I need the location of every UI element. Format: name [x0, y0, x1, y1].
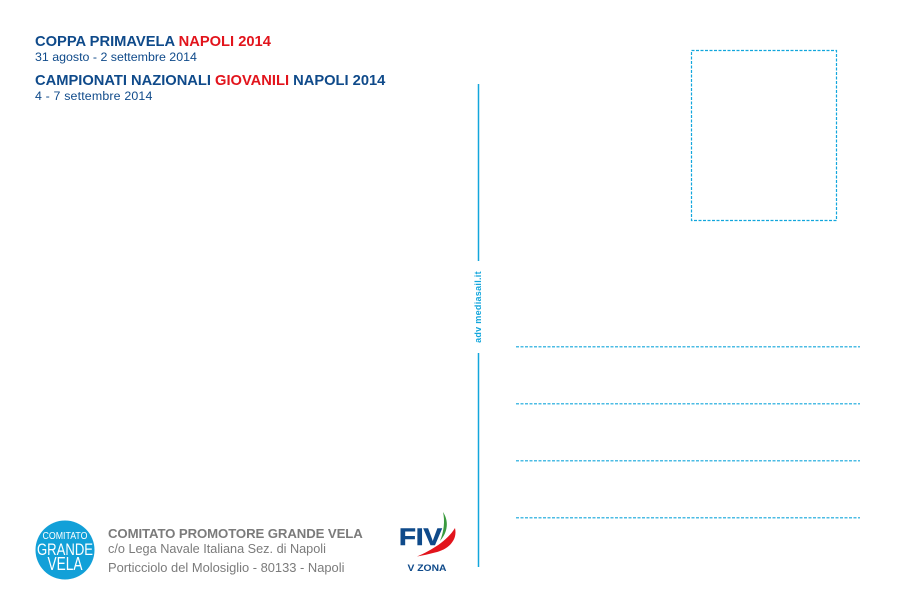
logo: FIV V Zona [399, 512, 456, 574]
address lines [516, 346, 860, 518]
logo: Comitato Grande Vela [36, 520, 94, 580]
logo: Comitato Grande Vela: VELA [48, 554, 82, 574]
credit: adv mediasail.it: adv mediasail.it [473, 271, 483, 343]
organisation address line 1: c/o Lega Navale Italiana Sez. di Napoli [108, 542, 326, 556]
heading: Campionati Nazionali Giovanili: CAMPIONATI NAZIONALI GIOVANILI NAPOLI 2014 [35, 72, 385, 88]
heading: Coppa Primavela: COPPA PRIMAVELA NAPOLI 2014 [35, 34, 271, 50]
logo: Comitato Grande Vela: COMITATO [42, 531, 88, 542]
logo: FIV V Zona: V ZONA [408, 563, 447, 574]
text: Campionati dates: 4 - 7 settembre 2014 [35, 89, 153, 103]
logo: FIV V Zona: FIV [399, 524, 442, 551]
text: Coppa Primavela dates: 31 agosto - 2 settembre 2014 [35, 50, 197, 64]
stamp box [690, 50, 838, 222]
organisation address line 2: Porticciolo del Molosiglio - 80133 - Napoli [108, 560, 344, 574]
organisation name: COMITATO PROMOTORE GRANDE VELA [108, 526, 363, 541]
